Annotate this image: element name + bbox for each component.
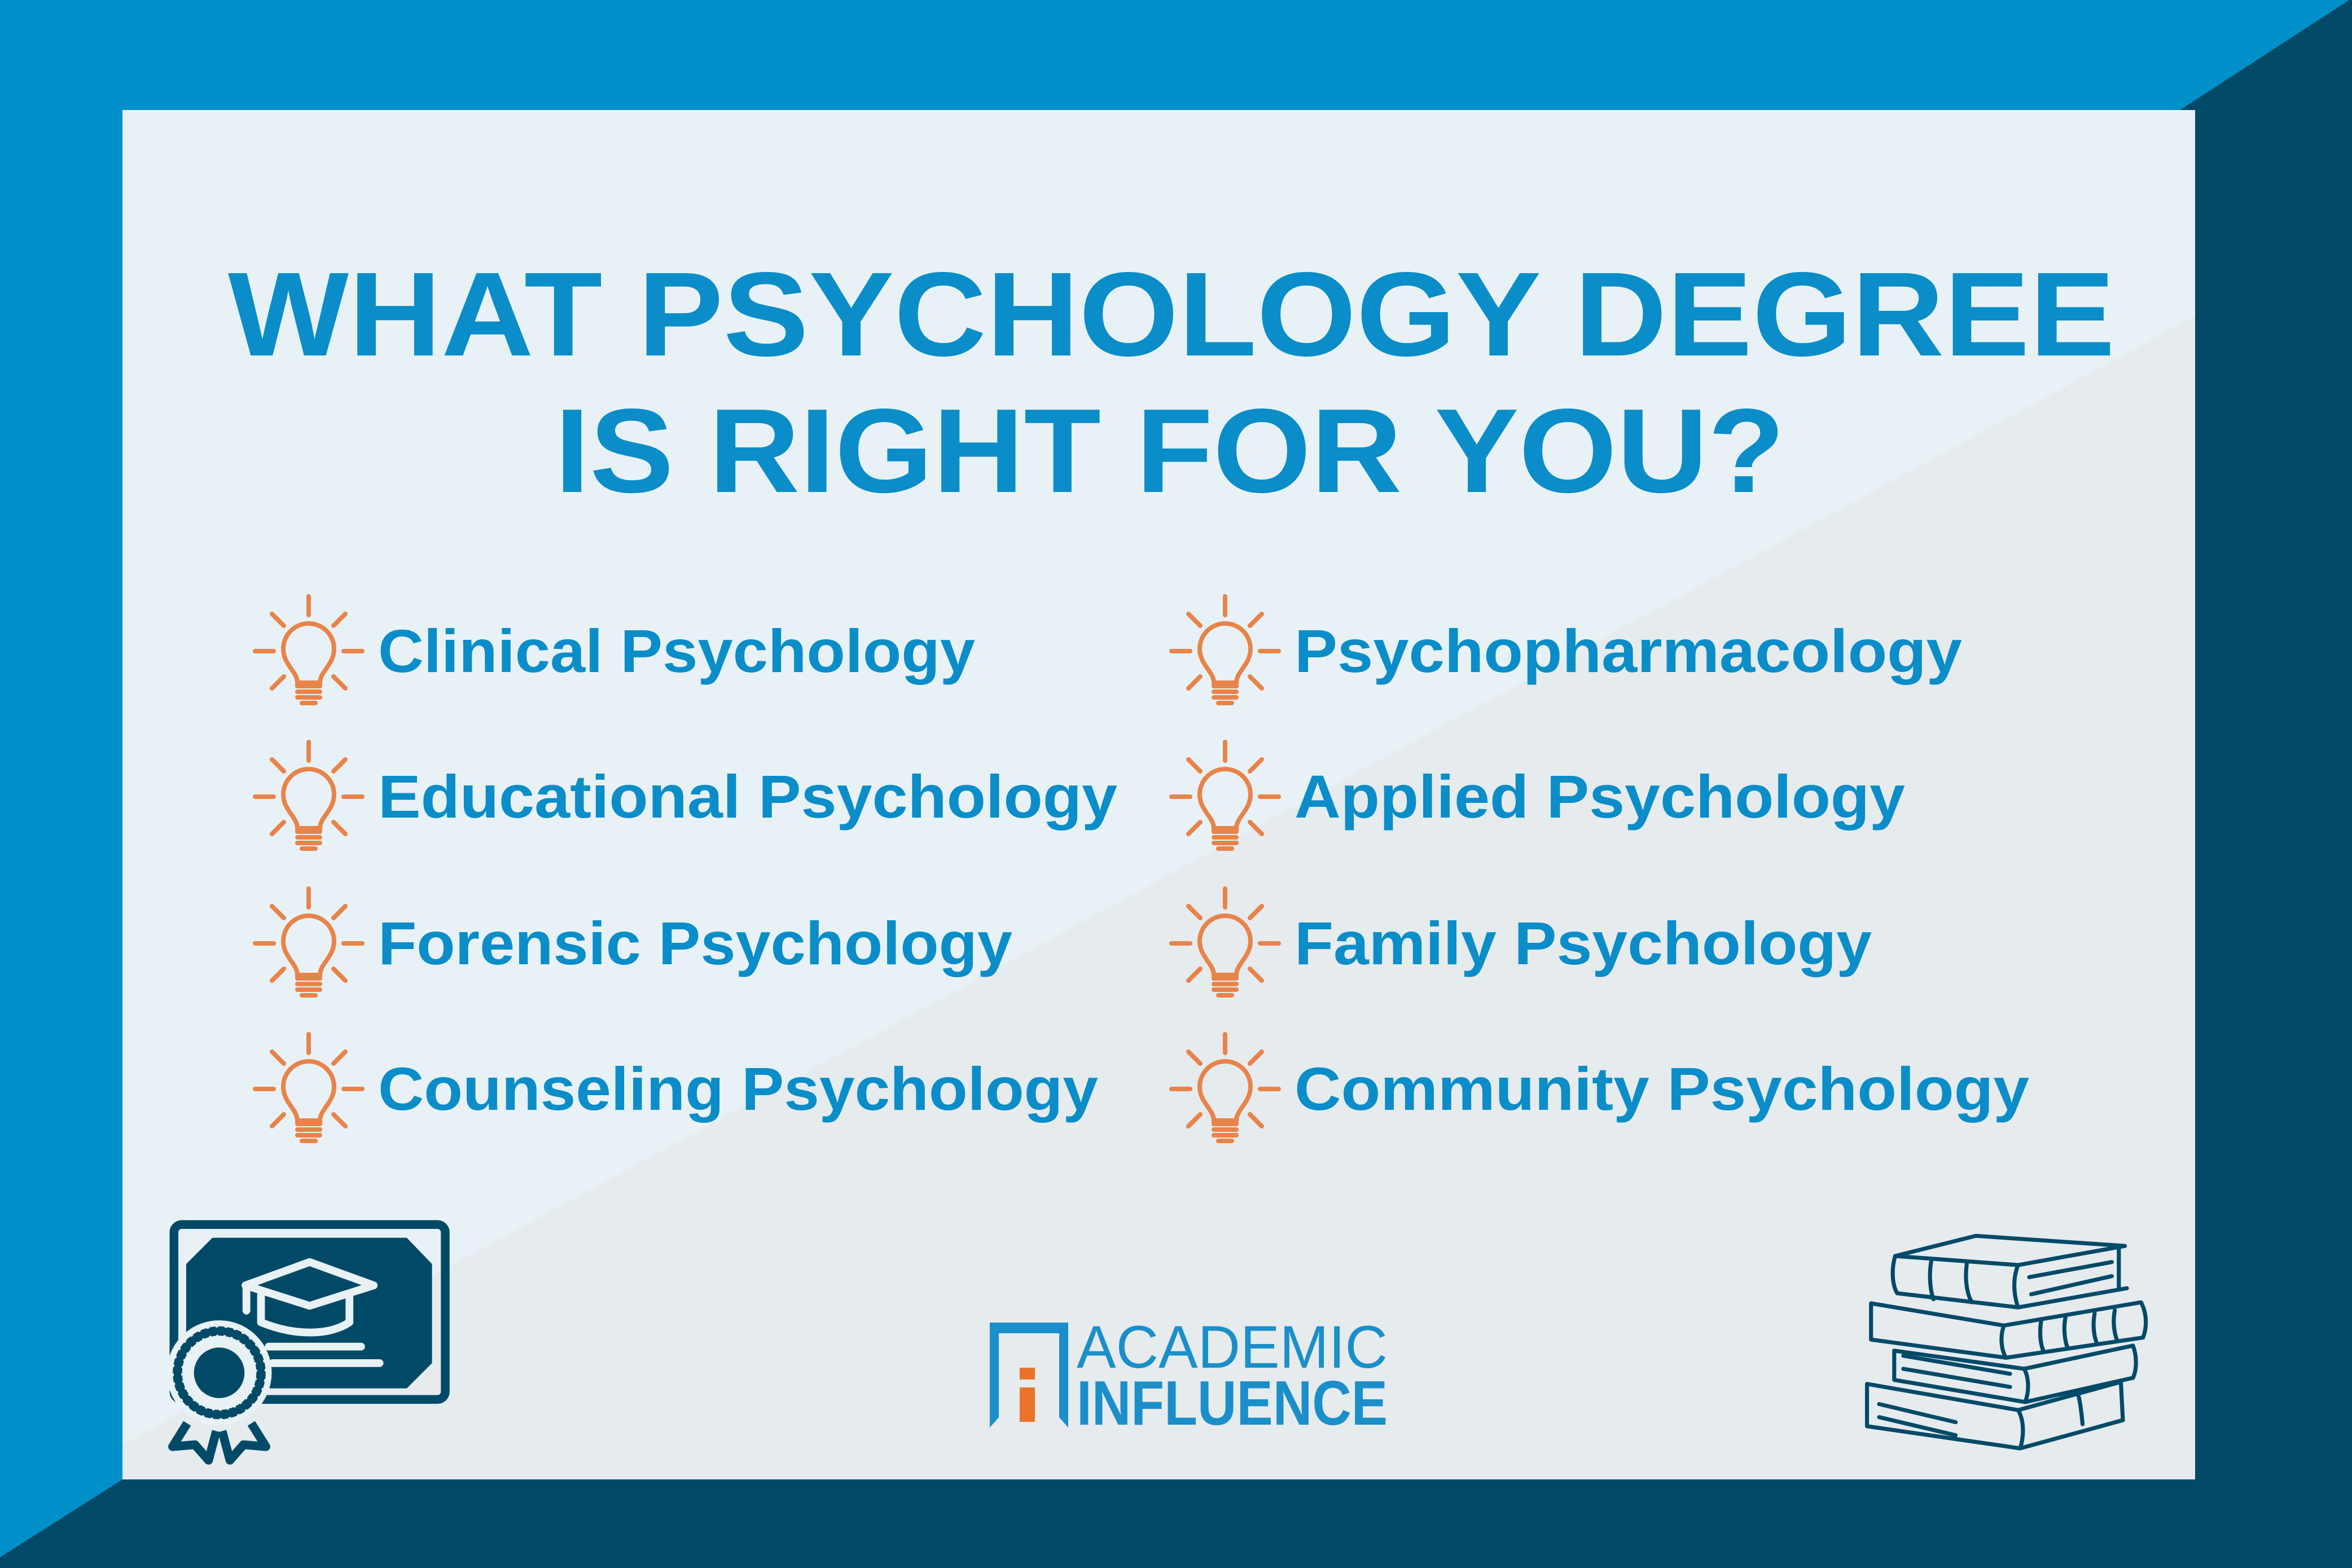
item: Forensic Psychology: Forensic Psychology <box>378 909 1012 977</box>
logo text <box>1077 1313 1388 1438</box>
title: WHAT PSYCHOLOGY DEGREE <box>228 247 2115 381</box>
item: Community Psychology <box>1171 1034 2029 1141</box>
icon: certificate <box>166 1224 445 1460</box>
item: Psychopharmacology: Psychopharmacology <box>1295 617 1962 685</box>
icon: stack of books <box>1867 1236 2146 1448</box>
list: degree types <box>255 596 2029 1141</box>
logo: Academic Influence <box>990 1313 1388 1438</box>
item: Applied Psychology: Applied Psychology <box>1295 762 1905 831</box>
title: IS RIGHT FOR YOU? <box>555 384 1785 517</box>
panel: main card <box>122 110 2195 1479</box>
item: Applied Psychology <box>1171 742 1905 849</box>
item: Educational Psychology <box>255 742 1117 849</box>
logo text: ACADEMIC <box>1077 1313 1388 1381</box>
item: Educational Psychology: Educational Psychology <box>378 762 1117 831</box>
item: Clinical Psychology <box>255 596 975 703</box>
item: Clinical Psychology: Clinical Psychology <box>378 617 975 685</box>
item: Family Psychology <box>1171 889 1872 995</box>
logo text: INFLUENCE <box>1077 1368 1388 1438</box>
item: Family Psychology: Family Psychology <box>1295 909 1872 977</box>
logo mark <box>990 1323 1068 1428</box>
item: Counseling Psychology <box>255 1034 1098 1141</box>
title <box>228 247 2115 517</box>
item: Community Psychology: Community Psychology <box>1295 1055 2029 1123</box>
item: Psychopharmacology <box>1171 596 1962 703</box>
item: Counseling Psychology: Counseling Psychology <box>378 1055 1098 1123</box>
item: Forensic Psychology <box>255 889 1012 995</box>
